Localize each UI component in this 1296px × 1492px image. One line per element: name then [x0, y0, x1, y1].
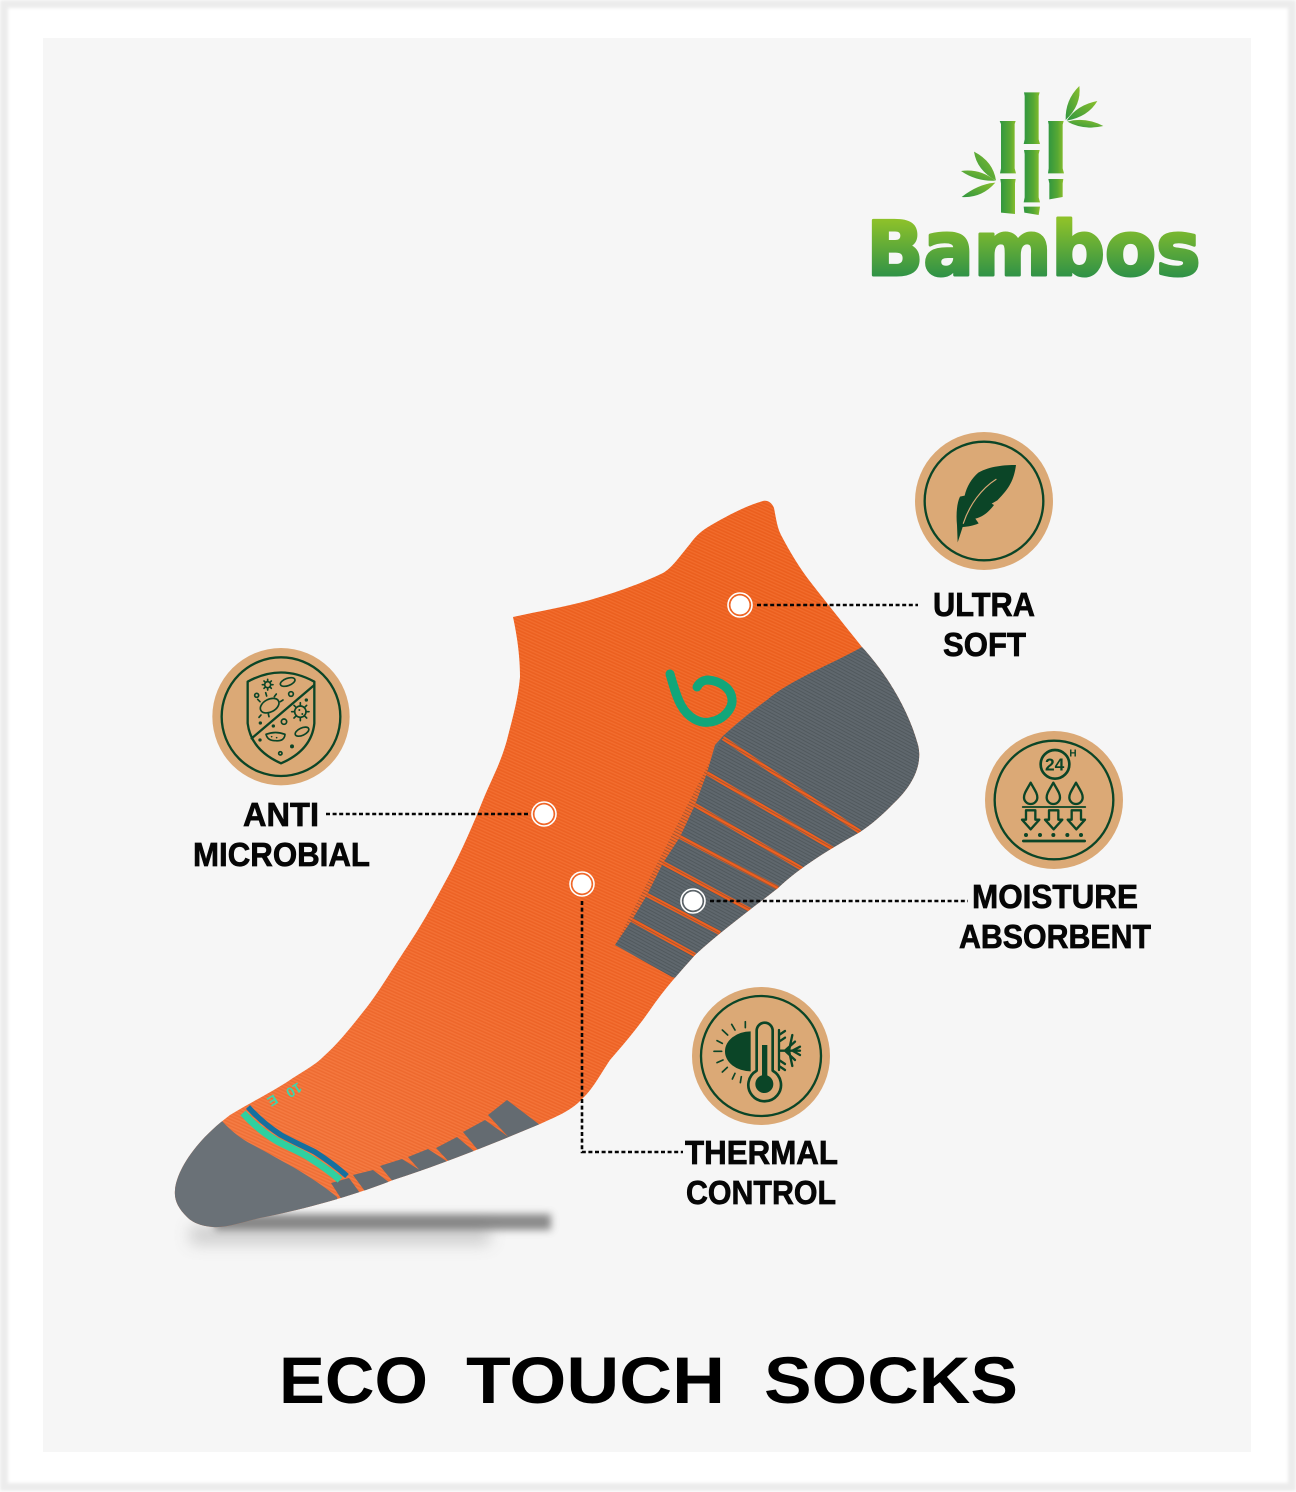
icon: moisture drops [985, 731, 1123, 869]
title [279, 1343, 1018, 1417]
sock toe bands [243, 1107, 347, 1180]
label: moisture absorbent: ABSORBENT [959, 918, 1151, 955]
sock toe stripes [331, 1100, 540, 1200]
label: anti microbial [193, 796, 370, 873]
leader line [582, 901, 683, 1152]
sock toe label: 10 [283, 1079, 305, 1101]
label: moisture absorbent: MOISTURE [972, 878, 1138, 915]
logo: Bambos [866, 86, 1200, 293]
sock emblem [670, 674, 732, 722]
sock toe label [266, 1082, 302, 1107]
sock illustration [150, 490, 950, 1240]
marker [532, 802, 556, 826]
marker [681, 889, 705, 913]
icon: moisture drops: H [1069, 748, 1077, 759]
icon: feather [915, 432, 1053, 570]
label: thermal control [685, 1134, 838, 1211]
label: anti microbial: MICROBIAL [193, 836, 370, 873]
callout: anti microbial [193, 648, 556, 873]
callout: ultra soft [728, 432, 1053, 663]
label: thermal control: CONTROL [686, 1174, 836, 1211]
sock texture on grey [616, 648, 920, 977]
callout: moisture absorbent [681, 731, 1151, 955]
label: thermal control: THERMAL [685, 1134, 838, 1171]
title: SOCKS [764, 1343, 1018, 1417]
label: moisture absorbent [959, 878, 1151, 955]
marker [570, 872, 594, 896]
label: anti microbial: ANTI [243, 796, 319, 833]
leader line [710, 900, 968, 902]
leader line [757, 604, 918, 606]
callout: thermal control [570, 872, 838, 1211]
sock arch stripes [615, 736, 862, 978]
label: ultra soft: ULTRA [933, 586, 1035, 623]
icon: thermometer sun snow [692, 987, 830, 1125]
marker [728, 593, 752, 617]
icon: bamboo [961, 86, 1103, 215]
sock heel [723, 647, 920, 832]
title: ECO [279, 1343, 428, 1417]
icon: shield with microbes [212, 648, 350, 785]
sock shadow [190, 1214, 551, 1244]
title: TOUCH [466, 1343, 725, 1417]
sock toe [174, 1121, 338, 1228]
logo wordmark: Bambos [866, 205, 1200, 293]
icon: moisture drops: 24 [1045, 755, 1065, 775]
label: ultra soft [933, 586, 1035, 663]
label: ultra soft: SOFT [943, 626, 1026, 663]
leader line [326, 813, 528, 815]
sock toe label: E [264, 1091, 281, 1110]
